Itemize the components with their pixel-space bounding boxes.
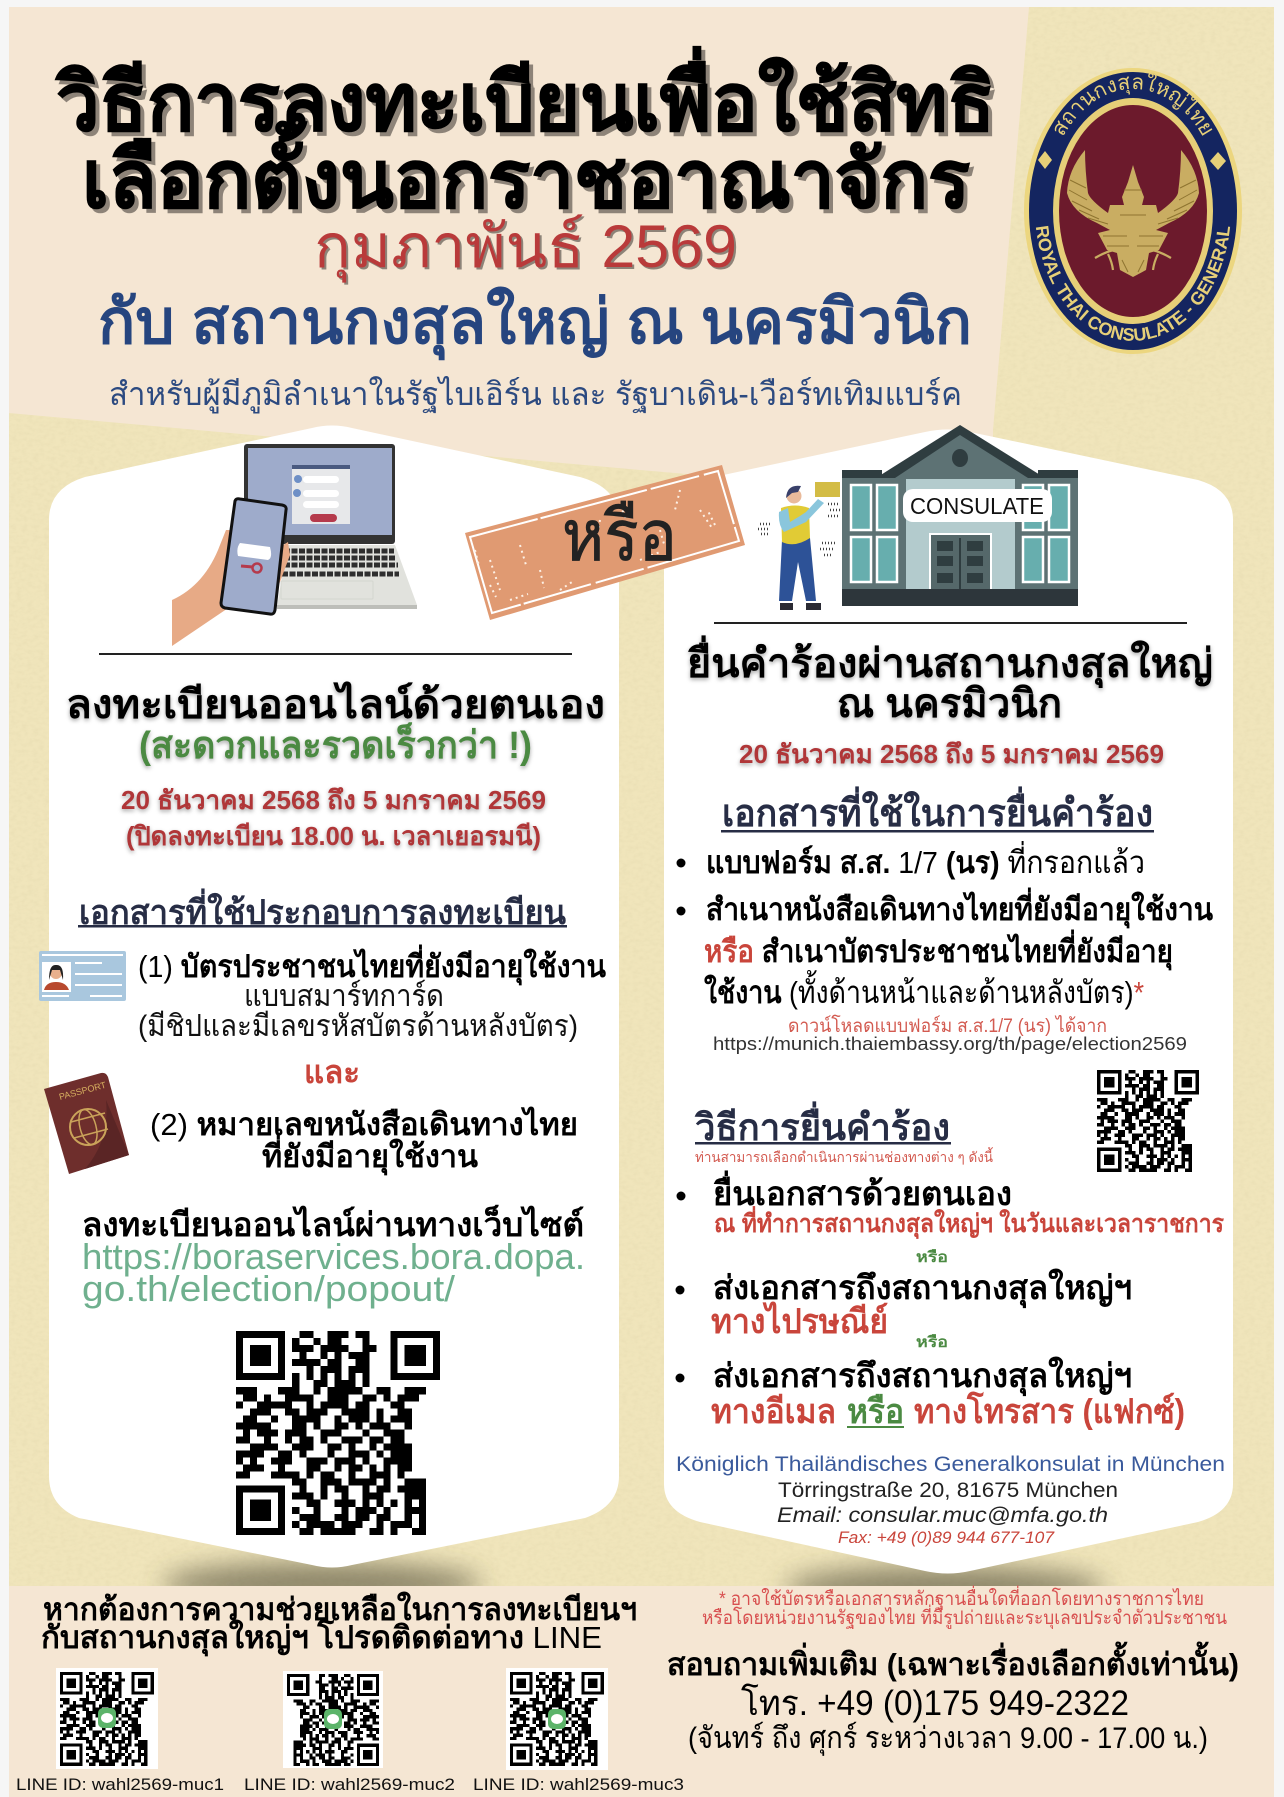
bullet list: submission methods	[676, 1170, 1225, 1431]
LINE IDs	[16, 1775, 684, 1794]
illustration: laptop and phone login	[172, 444, 417, 646]
left card subheading: (สะดวกและรวดเร็วกว่า !)	[139, 722, 532, 767]
website url: go.th/election/popout/	[82, 1268, 455, 1309]
bullet list: submission methods: ณ ที่ทำการสถานกงสุลใหญ่ฯ ในวันและเวลาราชการ	[714, 1206, 1225, 1240]
icon: consulate seal	[1024, 68, 1242, 354]
title: เลือกตั้งนอกราชอาณาจักร	[82, 121, 970, 224]
consulate address block: Fax: +49 (0)89 944 677-107	[838, 1528, 1055, 1547]
LINE help heading: กับสถานกงสุลใหญ่ฯ โปรดติดต่อทาง LINE	[41, 1619, 602, 1657]
icon: consulate seal: ROYAL THAI CONSULATE - GENERAL	[1036, 226, 1230, 341]
title	[55, 46, 995, 224]
submission methods note: ท่านสามารถเลือกดำเนินการผ่านช่องทางต่าง ๆ ดังนี้	[695, 1147, 993, 1165]
bullet list: submission methods: ทางอีเมล	[711, 1393, 836, 1431]
form download url: https://munich.thaiembassy.org/th/page/election2569	[713, 1034, 1187, 1054]
consulate address block: Königlich Thailändisches Generalkonsulat in München	[676, 1453, 1225, 1476]
icon: consulate seal: สถานกงสุลใหญ่ไทย	[1054, 74, 1212, 136]
title: วิธีการลงทะเบียนเพื่อใช้สิทธิ	[55, 46, 995, 147]
consulate address block: Törringstraße 20, 81675 München	[778, 1479, 1118, 1502]
bullet list: submission methods: หรือ	[847, 1393, 904, 1431]
QR code: LINE 2	[283, 1671, 383, 1768]
QR code: LINE 3	[506, 1668, 608, 1770]
bullet list: submission methods: ทางโทรสาร (แฟกซ์)	[914, 1391, 1185, 1431]
contact block: (จันทร์ ถึง ศุกร์ ระหว่างเวลา 9.00 - 17.00 น.)	[688, 1721, 1208, 1757]
LINE IDs: LINE ID: wahl2569-muc1	[16, 1775, 224, 1794]
consulate address block	[676, 1453, 1225, 1547]
illustration: consulate building and courier	[758, 425, 1078, 610]
document item 2: (2) หมายเลขหนังสือเดินทางไทย	[150, 1106, 578, 1142]
right documents heading: เอกสารที่ใช้ในการยื่นคำร้อง	[722, 786, 1153, 835]
consulate address block: Email: consular.muc@mfa.go.th	[777, 1504, 1108, 1527]
consulate heading: กับ สถานกงสุลใหญ่ ณ นครมิวนิก	[98, 286, 972, 360]
bullet list: documents: แบบฟอร์ม ส.ส. 1/7 (นร) ที่กรอกแล้ว	[706, 841, 1145, 880]
icon: passport	[44, 1073, 129, 1174]
icon: ID card	[39, 951, 126, 1001]
right card heading: ยื่นคำร้องผ่านสถานกงสุลใหญ่	[687, 635, 1213, 689]
QR code: online registration	[236, 1335, 440, 1531]
bullet list: documents: ใช้งาน (ทั้งด้านหน้าและด้านหลังบัตร)*	[704, 970, 1144, 1010]
bullet list: submission methods: หรือ	[916, 1249, 948, 1266]
bullet list: documents: สำเนาหนังสือเดินทางไทยที่ยังมีอายุใช้งาน	[706, 887, 1213, 929]
left documents heading: เอกสารที่ใช้ประกอบการลงทะเบียน	[79, 888, 566, 932]
contact block	[667, 1641, 1239, 1757]
month heading: กุมภาพันธ์ 2569	[314, 213, 737, 283]
card shadows	[162, 1562, 1105, 1610]
bullet list: documents	[676, 841, 1213, 1010]
footnote: หรือโดยหน่วยงานรัฐของไทย ที่มีรูปถ่ายและระบุเลขประจำตัวประชาชน	[702, 1604, 1227, 1630]
LINE IDs: LINE ID: wahl2569-muc3	[473, 1775, 684, 1794]
bullet list: documents: หรือ สำเนาบัตรประชาชนไทยที่ยังมีอายุ	[704, 929, 1173, 971]
footnote: * อาจใช้บัตรหรือเอกสารหลักฐานอื่นใดที่ออกโดยทางราชการไทย	[719, 1585, 1204, 1610]
icon: passport: PASSPORT	[58, 1080, 108, 1102]
footnote	[702, 1585, 1227, 1630]
sign: consulate: CONSULATE	[910, 493, 1044, 519]
bullet list: submission methods: ยื่นเอกสารด้วยตนเอง	[713, 1170, 1012, 1212]
form download note: ดาวน์โหลดแบบฟอร์ม ส.ส.1/7 (นร) ได้จาก	[788, 1014, 1107, 1037]
right card heading	[687, 635, 1213, 726]
LINE IDs: LINE ID: wahl2569-muc2	[244, 1775, 455, 1794]
stamp: or	[465, 465, 745, 620]
right card dates: 20 ธันวาคม 2568 ถึง 5 มกราคม 2569	[739, 739, 1164, 769]
right card heading: ณ นครมิวนิก	[837, 682, 1062, 726]
smart card note: แบบสมาร์ทการ์ด	[244, 979, 444, 1013]
divider: left card	[99, 653, 572, 655]
bullet list: submission methods: ส่งเอกสารถึงสถานกงสุลใหญ่ฯ	[713, 1356, 1132, 1397]
LINE help heading	[41, 1591, 637, 1657]
submission methods heading: วิธีการยื่นคำร้อง	[694, 1101, 950, 1148]
bullet list: submission methods: หรือ	[916, 1334, 948, 1351]
website heading: ลงทะเบียนออนไลน์ผ่านทางเว็บไซต์	[82, 1204, 584, 1243]
document item 2 line 2: ที่ยังมีอายุใช้งาน	[262, 1134, 478, 1176]
bullet list: submission methods: ทางไปรษณีย์	[711, 1301, 888, 1341]
QR code: form download	[1097, 1072, 1199, 1170]
and: และ	[304, 1054, 360, 1090]
bullet list: submission methods: ส่งเอกสารถึงสถานกงสุลใหญ่ฯ	[713, 1268, 1132, 1309]
document item 1: (1) บัตรประชาชนไทยที่ยังมีอายุใช้งาน	[138, 944, 606, 986]
left card closing time: (ปิดลงทะเบียน 18.00 น. เวลาเยอรมนี)	[126, 821, 541, 851]
divider: right card	[714, 622, 1187, 624]
eligibility subtitle: สำหรับผู้มีภูมิลำเนาในรัฐไบเอิร์น และ รัฐบาเดิน-เวือร์ทเทิมแบร์ค	[109, 376, 962, 414]
panel: consulate application card	[664, 430, 1233, 1574]
beige header panel	[9, 7, 1029, 500]
LINE help heading: หากต้องการความช่วยเหลือในการลงทะเบียนฯ	[43, 1591, 637, 1627]
chip note: (มีชิปและมีเลขรหัสบัตรด้านหลังบัตร)	[138, 1010, 578, 1043]
contact block: โทร. +49 (0)175 949-2322	[741, 1683, 1129, 1723]
website url	[82, 1236, 585, 1309]
left card heading: ลงทะเบียนออนไลน์ด้วยตนเอง	[66, 681, 605, 727]
panel: online registration card	[49, 426, 619, 1568]
contact block: สอบถามเพิ่มเติม (เฉพาะเรื่องเลือกตั้งเท่านั้น)	[667, 1641, 1239, 1682]
bottom contact band	[9, 1586, 1274, 1797]
stamp: or: หรือ	[562, 497, 677, 575]
left card dates: 20 ธันวาคม 2568 ถึง 5 มกราคม 2569	[121, 785, 546, 815]
QR code: LINE 1	[56, 1668, 158, 1769]
website url: https://boraservices.bora.dopa.	[82, 1236, 585, 1277]
